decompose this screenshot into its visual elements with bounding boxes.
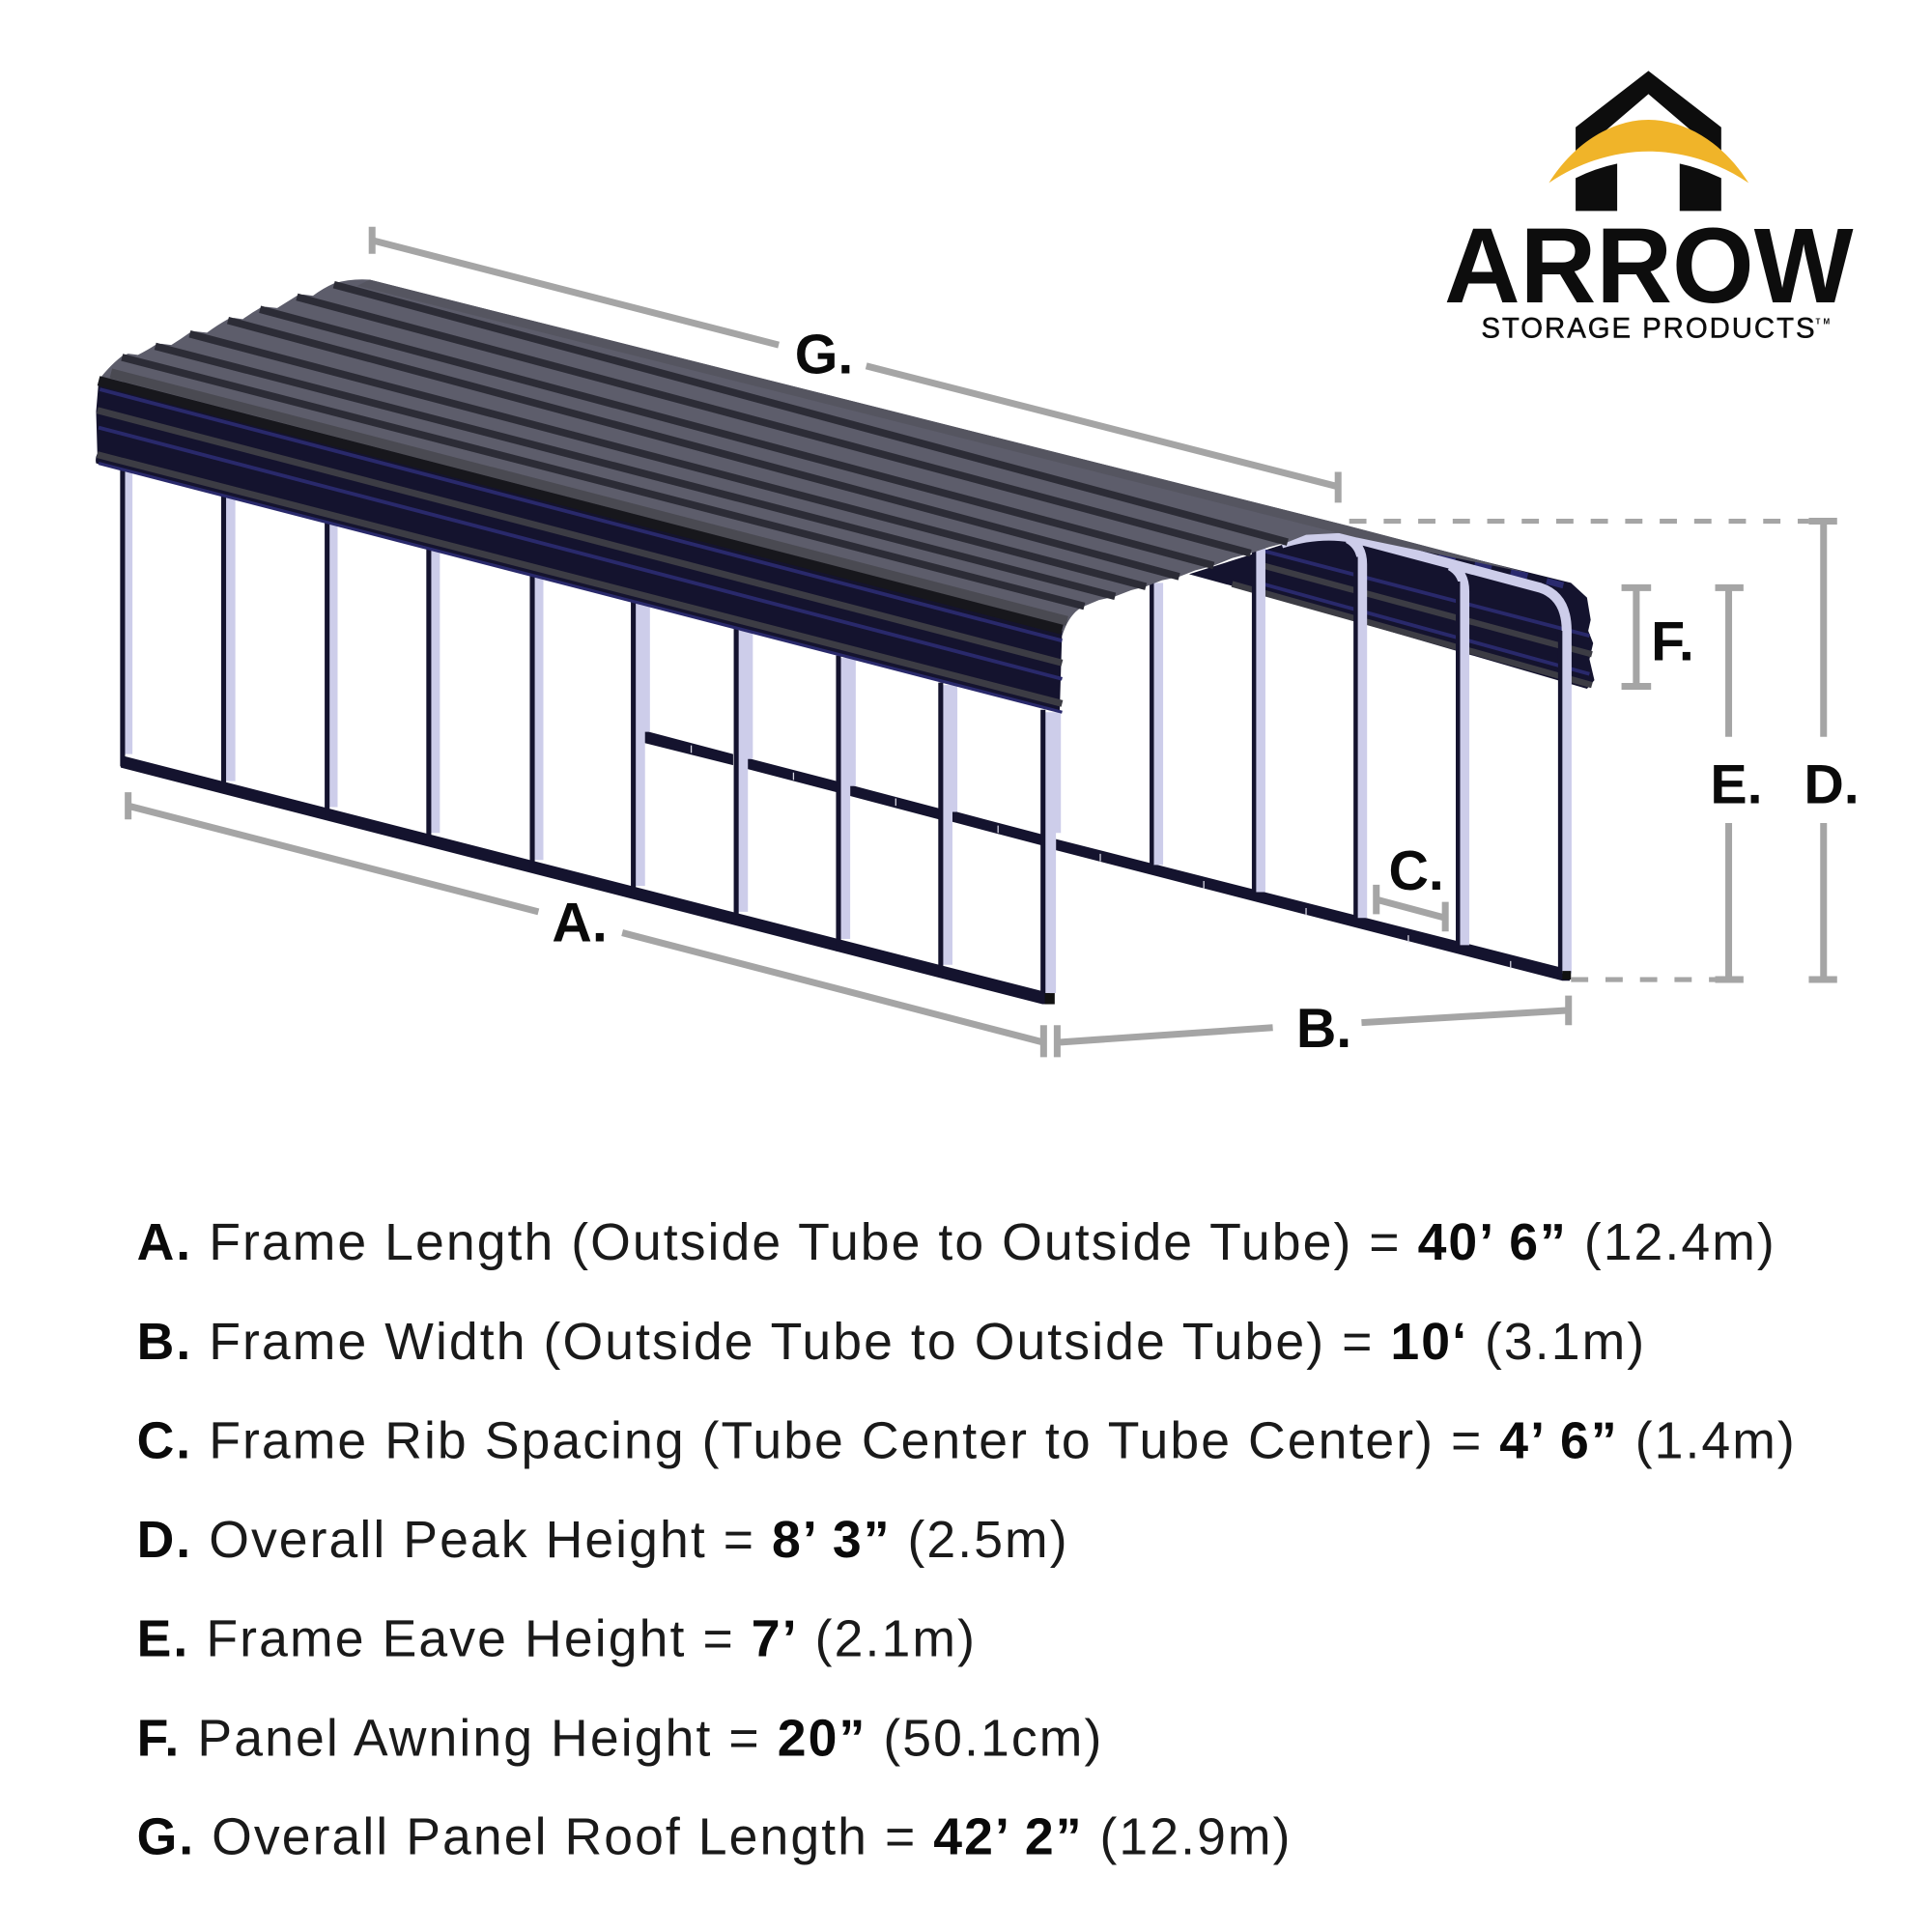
dimension B — [1057, 996, 1569, 1060]
bottom front rail — [121, 755, 1050, 1005]
icon: house roof — [1576, 71, 1721, 156]
logo wordmark: ARROW — [1444, 207, 1854, 326]
spec E: E. Frame Eave Height = 7’ (2.1m) — [137, 1610, 975, 1667]
mid rail segments — [644, 730, 1041, 845]
dimension C: C. — [1389, 840, 1444, 902]
far side rail — [1056, 839, 1570, 980]
dimension E — [1710, 587, 1763, 980]
dimension F: F. — [1651, 611, 1694, 673]
dimension C — [1377, 840, 1445, 931]
rail tick marks — [692, 746, 1511, 969]
dimension G — [372, 227, 1338, 502]
dimension B: B. — [1296, 998, 1351, 1060]
far side roof fascia — [1189, 529, 1595, 689]
icon: yellow arc — [1548, 120, 1748, 183]
trademark: TM — [1816, 317, 1831, 326]
spec G: G. Overall Panel Roof Length = 42’ 2” (12.9m) — [137, 1809, 1290, 1866]
spec A: A. Frame Length (Outside Tube to Outside Tube) = 40’ 6” (12.4m) — [137, 1214, 1775, 1271]
far side posts and rafter — [1150, 536, 1571, 980]
dimension E: E. — [1710, 754, 1763, 816]
spec C: C. Frame Rib Spacing (Tube Center to Tube Center) = 4’ 6” (1.4m) — [137, 1413, 1795, 1470]
front side posts — [120, 469, 1061, 1005]
dimension D: D. — [1804, 754, 1860, 816]
dimension D — [1350, 522, 1860, 980]
roof top panel — [99, 279, 1528, 636]
carport illustration — [96, 279, 1595, 1005]
logo tagline: STORAGE PRODUCTS — [1481, 312, 1815, 344]
dimension F — [1622, 587, 1694, 686]
spec D: D. Overall Peak Height = 8’ 3” (2.5m) — [137, 1512, 1067, 1569]
dimension A: A. — [552, 892, 608, 953]
spec F: F. Panel Awning Height = 20” (50.1cm) — [137, 1711, 1101, 1768]
logo: Arrow Storage Products — [1444, 71, 1854, 344]
specification list — [137, 1214, 1795, 1866]
front roof fascia — [96, 381, 1062, 712]
spec B: B. Frame Width (Outside Tube to Outside Tube) = 10‘ (3.1m) — [137, 1314, 1644, 1371]
dimension A — [128, 792, 1043, 1057]
dimension G: G. — [795, 324, 853, 385]
icon: house walls — [1576, 163, 1721, 211]
